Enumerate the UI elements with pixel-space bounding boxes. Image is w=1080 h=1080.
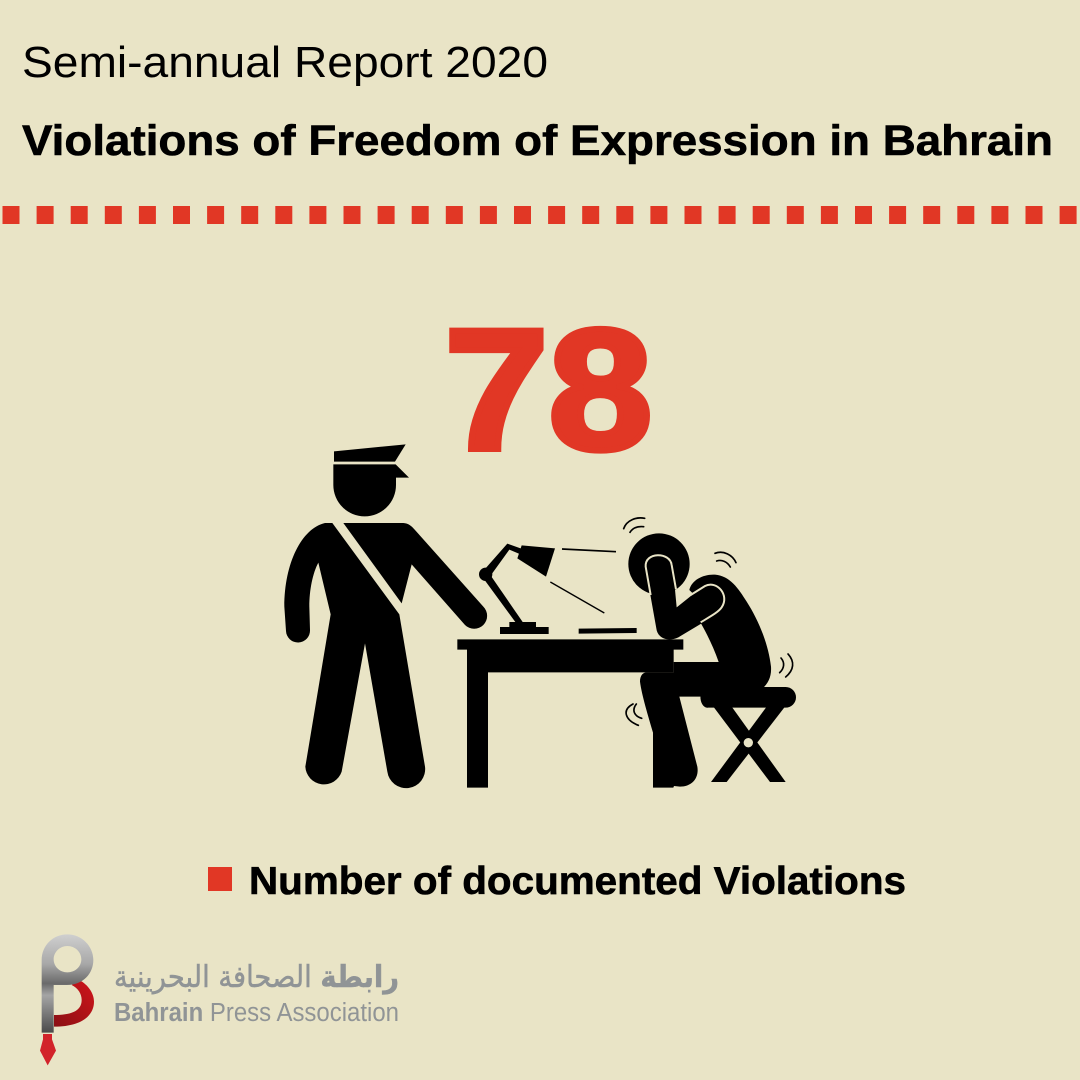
icon: police officer xyxy=(284,444,487,788)
dotted red divider xyxy=(2,206,1080,224)
logo pen nib xyxy=(40,1034,56,1065)
legend marker xyxy=(208,867,232,891)
icon: desk, lamp and seated person xyxy=(457,518,796,788)
logo: Bahrain Press Association xyxy=(40,934,399,1065)
officer cap xyxy=(334,444,406,462)
officer body xyxy=(284,523,425,788)
logo Arabic name: رابطة الصحافة البحرينية xyxy=(114,960,399,995)
logo English name: Bahrain Press Association xyxy=(114,999,399,1027)
logo grey stem and loop xyxy=(42,934,93,1033)
big number: 78 violations: 78 xyxy=(444,294,652,486)
stool xyxy=(700,687,796,782)
seated person arms xyxy=(645,554,724,639)
paper on desk xyxy=(579,628,637,634)
title: main heading: Violations of Freedom of Expression in Bahrain xyxy=(22,117,1053,165)
officer arm xyxy=(343,523,487,629)
seated person head xyxy=(628,533,690,595)
logo red bowl xyxy=(54,980,94,1027)
title: report label: Semi-annual Report 2020 xyxy=(22,38,548,87)
desk xyxy=(457,639,683,788)
legend label: Number of documented Violations xyxy=(249,860,906,903)
shaking motion marks xyxy=(624,518,793,725)
desk lamp xyxy=(479,544,555,634)
lamp light rays xyxy=(562,549,616,552)
seated person torso and legs xyxy=(640,575,771,788)
officer head xyxy=(333,464,409,516)
logo mark xyxy=(40,934,94,1065)
